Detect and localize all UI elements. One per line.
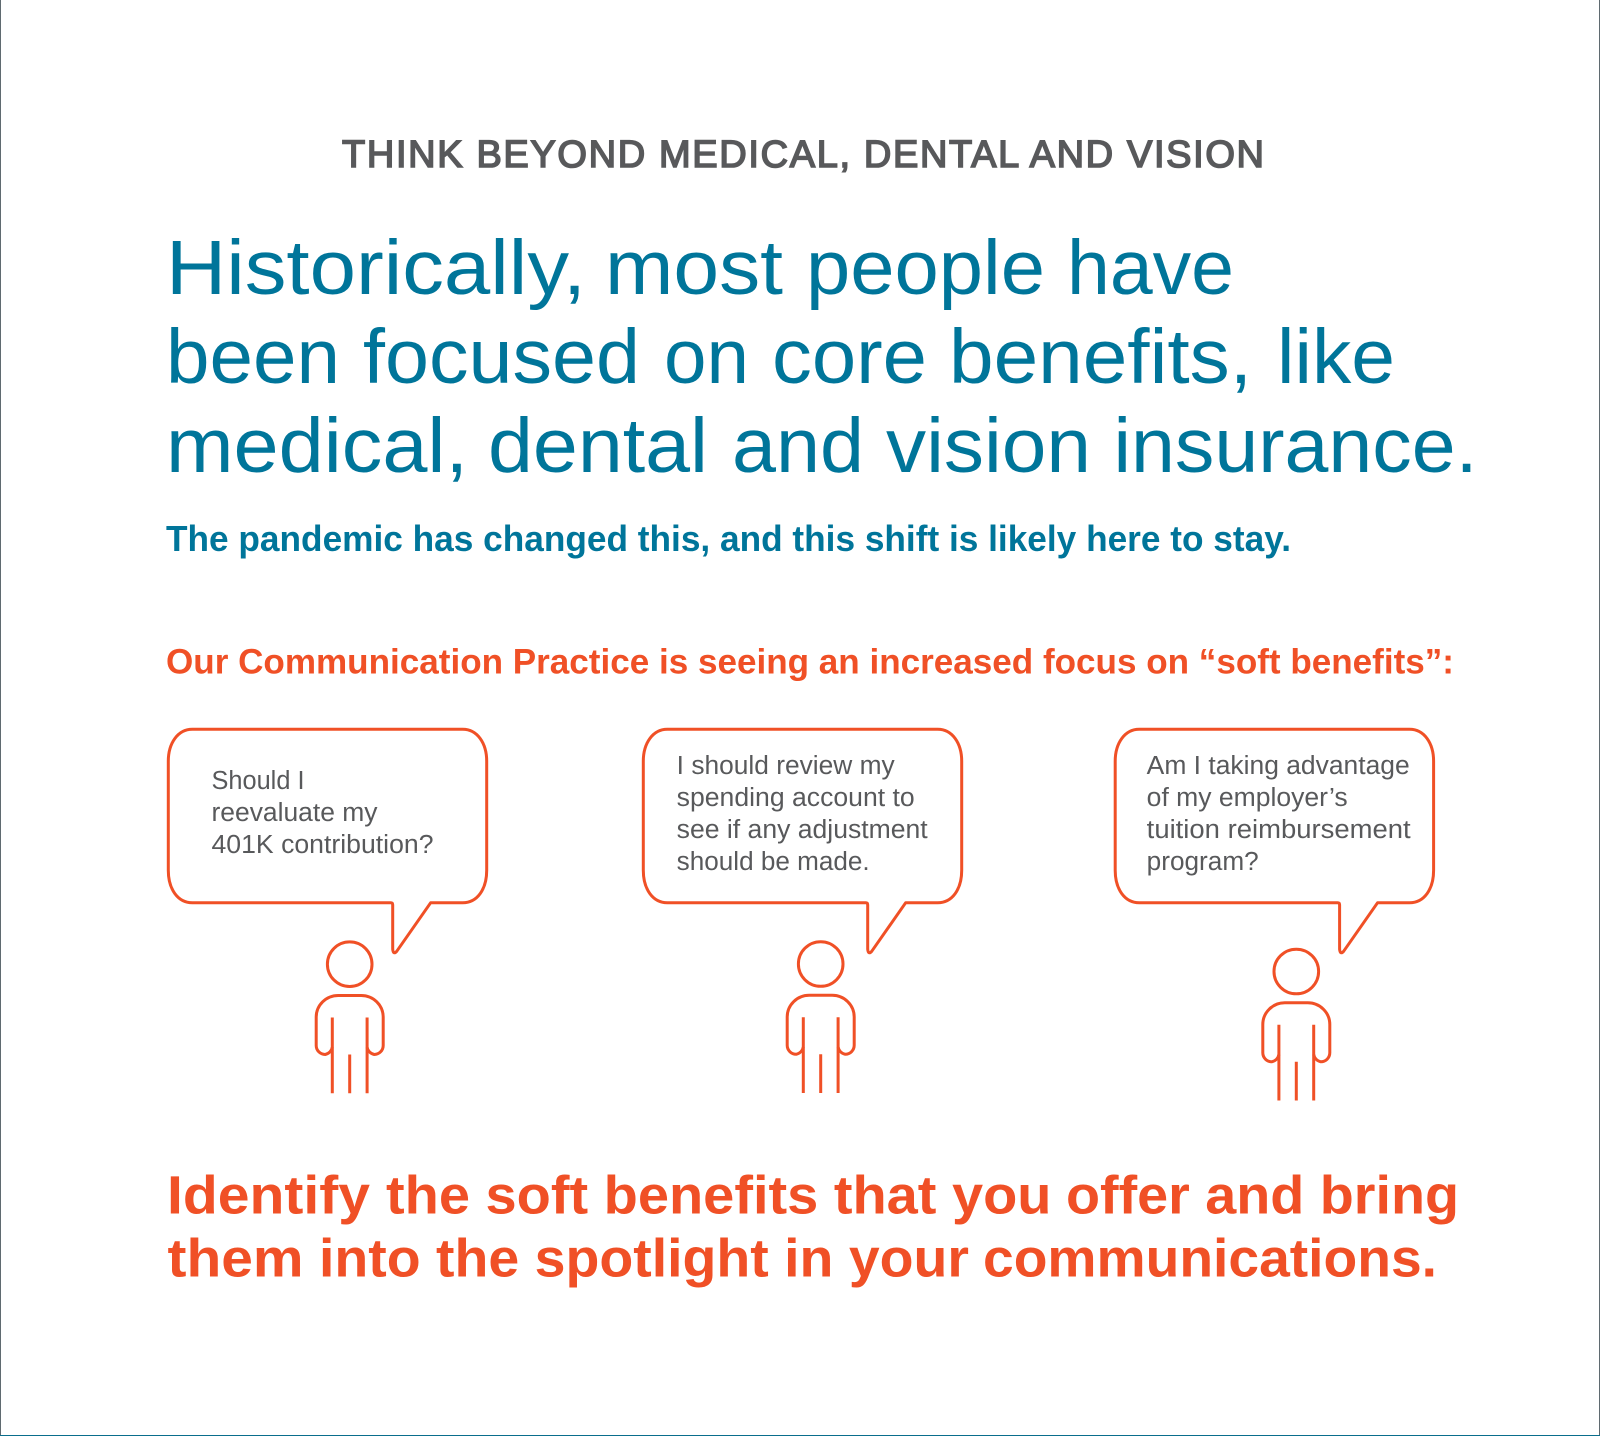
main headline: have bbox=[1067, 225, 1234, 311]
icon: person 3 bbox=[1263, 949, 1330, 1100]
quote 3: Am I taking advantage bbox=[1147, 752, 1410, 780]
panel: speaker 3 bbox=[1115, 729, 1434, 1100]
subheading: pandemic shift: The pandemic has changed this, and this shift is likely here to stay. bbox=[166, 518, 1291, 559]
quote 3: program? bbox=[1147, 848, 1259, 876]
main headline: been bbox=[166, 314, 340, 400]
quote 2: spending account to bbox=[677, 784, 915, 812]
quote 2 bbox=[677, 752, 928, 876]
quote 1: Should I bbox=[212, 767, 304, 795]
icon: person 2 bbox=[787, 942, 854, 1093]
closing call to action bbox=[167, 1166, 1459, 1288]
main headline: most bbox=[605, 225, 783, 311]
main headline: core bbox=[772, 314, 927, 400]
panel: speaker 1 bbox=[168, 729, 487, 1093]
quote 1 bbox=[212, 767, 434, 859]
quote 1: reevaluate my bbox=[212, 799, 378, 827]
main headline bbox=[166, 225, 1478, 489]
closing call to action: offer and bring bbox=[1066, 1166, 1459, 1226]
eyebrow heading: THINK BEYOND MEDICAL, DENTAL AND VISION bbox=[342, 134, 1264, 176]
speech bubble 1 bbox=[168, 729, 487, 953]
quote 3: of my employer’s bbox=[1147, 784, 1348, 812]
section intro: soft benefits: Our Communication Practice is seeing an increased focus on “soft benefits”: bbox=[166, 642, 1454, 682]
main headline: medical, bbox=[166, 403, 468, 489]
main headline: on bbox=[664, 314, 749, 400]
quote 2: see if any adjustment bbox=[677, 816, 928, 844]
main headline: benefits, bbox=[949, 314, 1252, 400]
main headline: Historically, bbox=[166, 225, 586, 311]
panel: speaker 2 bbox=[643, 729, 962, 1093]
main headline: focused bbox=[363, 314, 640, 400]
main headline: and bbox=[732, 403, 864, 489]
closing call to action: Identify bbox=[167, 1166, 370, 1226]
icon: person 1 bbox=[316, 942, 383, 1093]
main headline: like bbox=[1277, 314, 1395, 400]
closing call to action: them bbox=[168, 1228, 304, 1288]
quote 2: I should review my bbox=[677, 752, 895, 780]
quote 3 bbox=[1147, 752, 1411, 876]
speech bubble 2 bbox=[643, 729, 962, 953]
closing call to action: into the spotlight in your bbox=[319, 1228, 969, 1288]
quote 3: tuition reimbursement bbox=[1147, 816, 1411, 844]
closing call to action: the soft benefits that you bbox=[386, 1166, 1052, 1226]
quote 2: should be made. bbox=[677, 848, 870, 876]
main headline: people bbox=[806, 225, 1045, 311]
speech bubble 3 bbox=[1115, 729, 1434, 953]
main headline: dental bbox=[488, 403, 708, 489]
closing call to action: communications. bbox=[983, 1228, 1437, 1288]
main headline: insurance. bbox=[1114, 403, 1478, 489]
main headline: vision bbox=[886, 403, 1091, 489]
quote 1: 401K contribution? bbox=[212, 831, 434, 859]
